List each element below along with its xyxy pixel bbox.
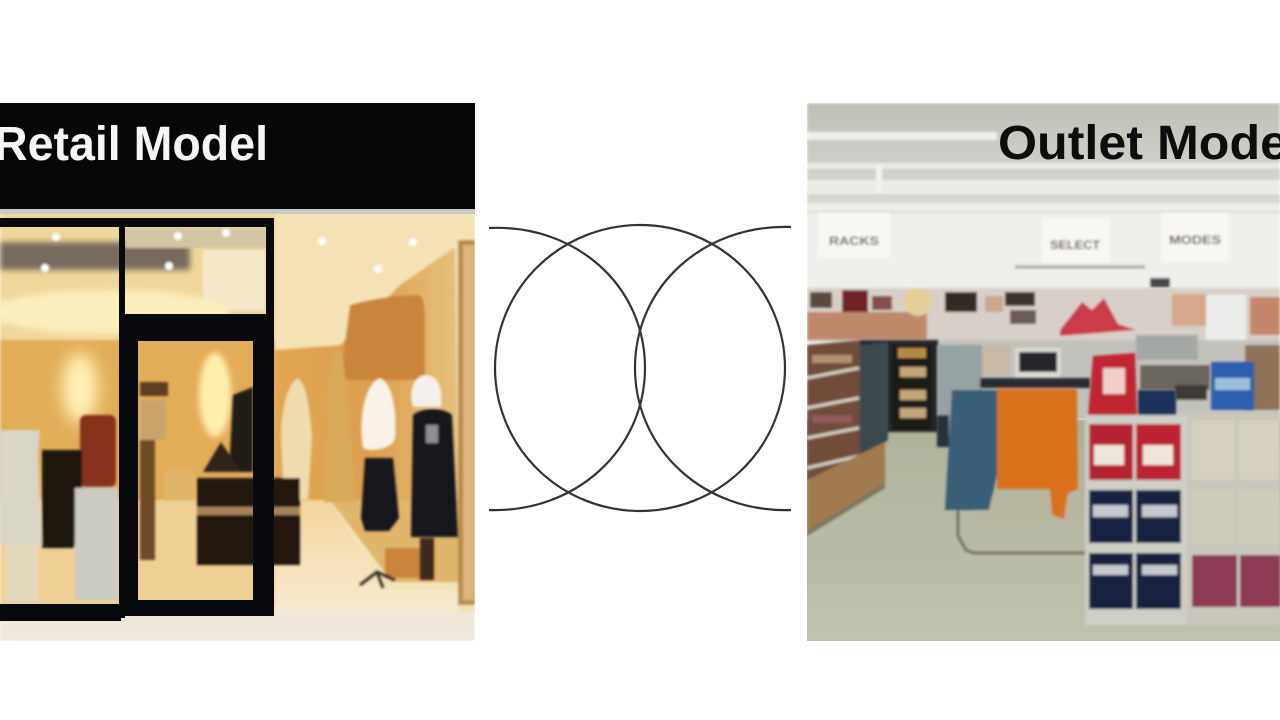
right arc (635, 227, 791, 510)
heading: Outlet Model: Outlet Model (998, 117, 1280, 170)
back wall with hanging signs: MODES (1169, 233, 1221, 247)
panel: outlet store photo (807, 103, 1280, 641)
display boxes and gondola (1085, 353, 1280, 625)
left shelves (807, 340, 938, 536)
merchandise wall (807, 288, 1280, 420)
mannequins and displays (0, 350, 458, 603)
back wall with hanging signs (807, 212, 1280, 293)
back wall with hanging signs: RACKS (829, 234, 879, 248)
diagram: overlapping circles (489, 225, 791, 511)
clothing rack (937, 345, 1090, 553)
store floor (807, 420, 1280, 641)
black door frame (0, 218, 274, 621)
left arc (489, 228, 645, 510)
storefront interior background (0, 210, 475, 641)
ceiling (807, 103, 1280, 215)
panel: retail storefront photo (0, 103, 475, 641)
centre circle (495, 225, 785, 511)
heading: Retail Model: Retail Model (0, 118, 268, 171)
back wall with hanging signs: SELECT (1050, 238, 1101, 252)
header band (0, 103, 475, 209)
